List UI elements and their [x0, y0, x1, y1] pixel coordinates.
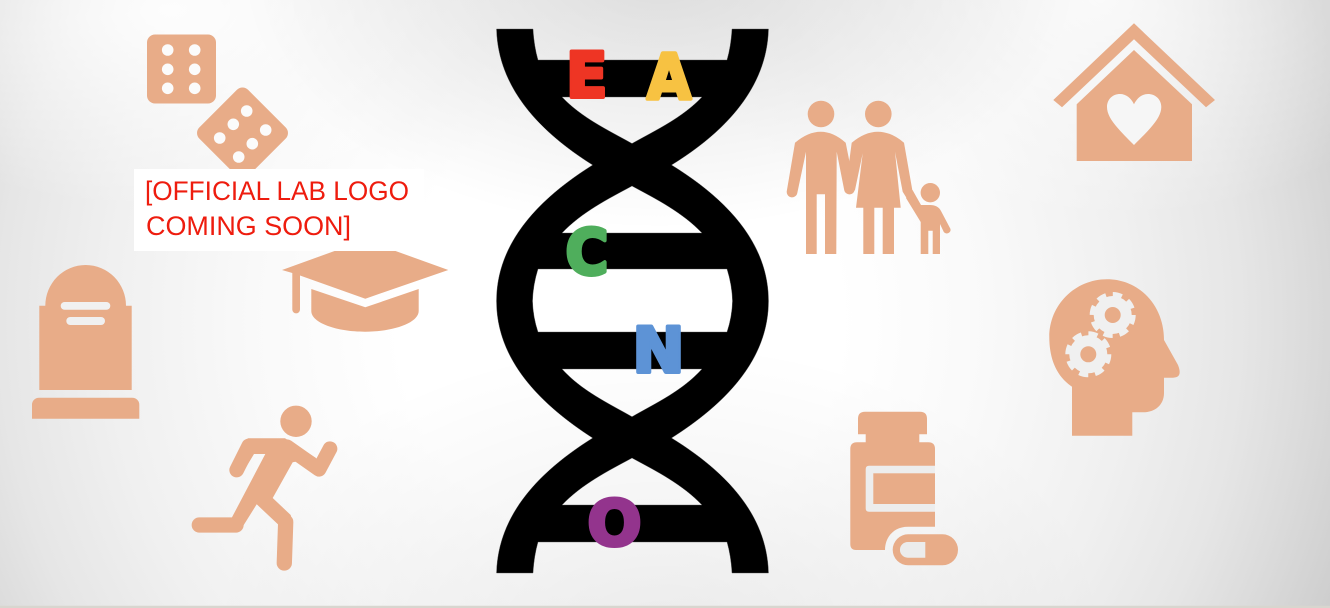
icon: graduation cap	[282, 240, 448, 332]
letter N: N	[632, 314, 684, 387]
icon: runner	[199, 406, 330, 563]
icon: house with heart	[1053, 23, 1215, 161]
dna double helix	[496, 29, 768, 573]
logo placeholder callout	[134, 169, 424, 251]
letter C: C	[566, 216, 608, 289]
logo placeholder callout: [OFFICIAL LAB LOGO	[145, 176, 409, 206]
icon: head with gears	[1049, 279, 1180, 436]
letter A: A	[647, 41, 691, 114]
logo placeholder callout: COMING SOON]	[146, 211, 351, 241]
letter E: E	[566, 39, 608, 112]
icon: family	[787, 101, 951, 254]
icon: gravestone	[32, 265, 139, 419]
letters: ECONO	[566, 39, 691, 560]
icon: pill bottle	[850, 412, 958, 565]
icon: tilted die	[194, 84, 291, 182]
letter O: O	[588, 487, 642, 560]
icon: upright die	[147, 34, 216, 104]
